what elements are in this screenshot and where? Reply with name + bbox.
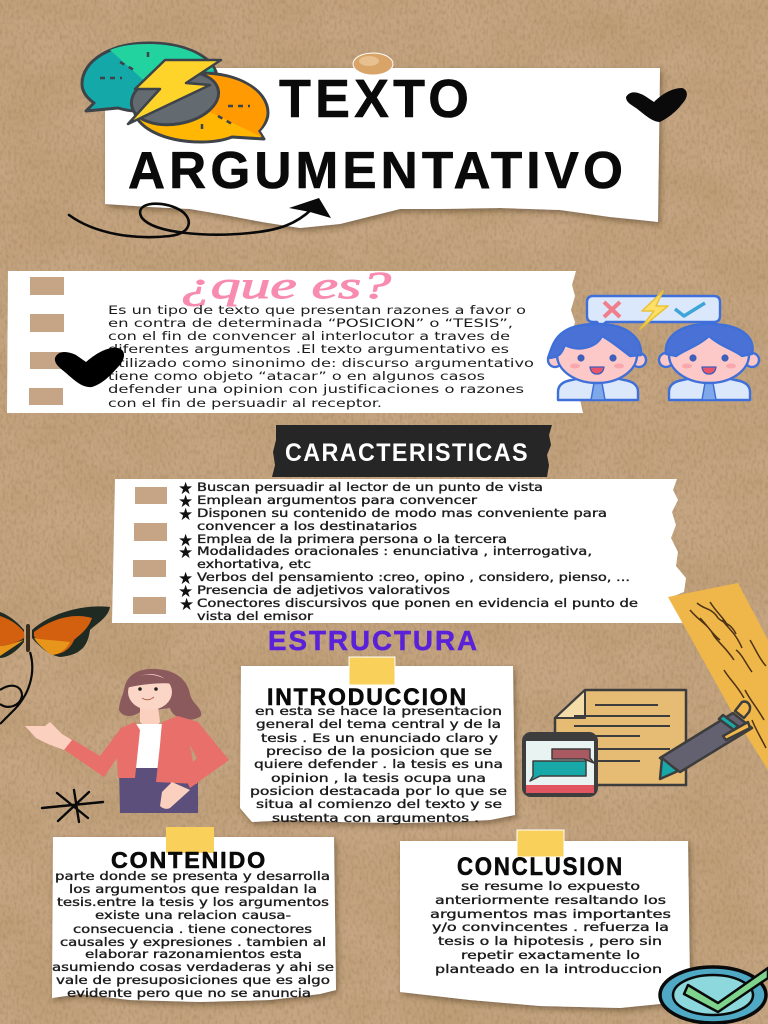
definition text: utilizado como sinonimo de: discurso argumentativo — [108, 356, 534, 370]
body text: argumentos mas importantes — [430, 907, 671, 921]
body text: parte donde se presenta y desarrolla — [55, 869, 330, 883]
yellow tape — [517, 830, 564, 857]
body text: se resume lo expuesto — [461, 879, 640, 893]
phone — [523, 733, 597, 796]
star bullets: ★ — [178, 531, 193, 551]
body text: los argumentos que respaldan la — [69, 882, 317, 896]
torn paper: caracteristicas — [112, 479, 686, 623]
title text: TEXTO — [279, 69, 473, 129]
definition text: diferentes argumentos .El texto argumentativo es — [108, 342, 509, 356]
icon: butterfly — [0, 606, 110, 658]
body text: anteriormente resaltando los — [435, 893, 666, 907]
panel: que es — [7, 265, 583, 413]
panel: contenido — [52, 827, 336, 1002]
body text: situa al comienzo del texto y se — [256, 797, 502, 811]
body text: tesis o la hipotesis , pero sin — [438, 934, 662, 948]
icon: aged handwritten paper — [668, 583, 768, 770]
body text: evidente pero que no se anuncia — [67, 986, 311, 1000]
body text: tesis . Es un enunciado claro y — [261, 731, 498, 745]
list text: Conectores discursivos que ponen en evidencia el punto de — [197, 596, 638, 610]
heading: CONCLUSION — [457, 853, 624, 881]
body text: asumiendo cosas verdaderas y ahi se — [52, 960, 334, 974]
title text — [128, 69, 627, 200]
body text: existe una relacion causa- — [95, 908, 291, 922]
body text: opinion , la tesis ocupa una — [271, 771, 486, 785]
torn paper: title — [105, 68, 660, 228]
body text: y/o convincentes . refuerza la — [432, 920, 669, 934]
body text: en esta se hace la presentacion — [255, 704, 502, 718]
speech bubble with cross and check — [587, 291, 720, 329]
paper cut-outs — [29, 277, 64, 405]
star bullets — [178, 479, 194, 615]
illustration: presenting woman — [25, 669, 229, 813]
body text: repetir exactamente lo — [461, 948, 640, 962]
body text: elaborar razonamientos esta — [85, 947, 302, 961]
body text: general del tema central y de la — [256, 717, 501, 731]
torn paper: que es — [7, 271, 583, 413]
body text — [250, 704, 507, 825]
star bullets: ★ — [178, 569, 193, 589]
star bullets: ★ — [178, 505, 193, 525]
icon: black check top right — [626, 88, 687, 122]
title text: ARGUMENTATIVO — [128, 142, 627, 200]
body text: planteado en la introduccion — [435, 962, 662, 976]
body text — [430, 879, 671, 976]
definition text: defender una opinion con justificaciones o razones — [108, 382, 524, 396]
list text: Emplea de la primera persona o la tercera — [197, 532, 507, 546]
icon: document, phone and pen — [523, 690, 752, 796]
body text: sustenta con argumentos . — [272, 811, 479, 825]
title panel — [69, 43, 687, 237]
boy right — [659, 324, 759, 400]
list text: Modalidades oracionales : enunciativa , interrogativa, — [197, 544, 592, 558]
definition text: Es un tipo de texto que presentan razones a favor o — [108, 303, 526, 317]
body text — [52, 869, 334, 1000]
definition text: con el fin de persuadir al receptor. — [108, 396, 382, 410]
star bullets: ★ — [178, 582, 193, 602]
heading: INTRODUCCION — [267, 684, 468, 711]
document — [555, 690, 686, 785]
list text: Verbos del pensamiento :creo, opino , considero, pienso, ... — [197, 570, 630, 584]
star bullets: ★ — [178, 543, 193, 563]
boy left — [548, 324, 646, 400]
body text: preciso de la posicion que se — [266, 744, 492, 758]
black scribble — [0, 652, 32, 724]
yellow tape — [349, 657, 395, 685]
icon: debate speech bubbles with lightning — [82, 43, 268, 142]
yellow tape — [166, 827, 214, 853]
heading: estructura: ESTRUCTURA — [268, 625, 479, 656]
heading: caracteristicas: CARACTERISTICAS — [285, 439, 529, 467]
star bullets: ★ — [178, 479, 193, 499]
heading: que es: ¿que es? — [181, 265, 391, 307]
body text: consecuencia . tiene conectores — [73, 922, 312, 936]
icon: check badge — [660, 967, 768, 1023]
definition text — [108, 303, 534, 410]
star bullets: ★ — [178, 492, 193, 512]
list text — [197, 480, 638, 623]
list text: Presencia de adjetivos valorativos — [197, 583, 450, 597]
definition text: tiene como objeto “atacar” o en algunos casos — [108, 369, 485, 383]
panel: conclusion — [400, 830, 690, 1008]
body text: causales y expresiones . tambien al — [60, 935, 326, 949]
body text: vale de presuposiciones que es algo — [56, 973, 330, 987]
star bullets: ★ — [179, 595, 194, 615]
heading: CONTENIDO — [111, 847, 267, 873]
icon: two debating boys — [548, 291, 759, 400]
note paper — [52, 837, 336, 1002]
list text: vista del emisor — [197, 609, 313, 623]
list text: Disponen su contenido de modo mas conveniente para — [197, 506, 607, 520]
list text: Buscan persuadir al lector de un punto de vista — [197, 480, 543, 494]
panel: introduccion — [240, 657, 515, 825]
definition text: con el fin de convencer al interlocutor a traves de — [108, 329, 510, 343]
note paper — [240, 666, 515, 823]
body text: quiere defender . la tesis es una — [254, 757, 503, 771]
pen — [660, 702, 752, 779]
definition text: en contra de determinada “POSICION” o “TESIS”, — [108, 316, 513, 330]
list text: Emplean argumentos para convencer — [197, 493, 477, 507]
pushpin — [353, 53, 393, 75]
note paper — [400, 841, 690, 1008]
list text: convencer a los destinatarios — [197, 519, 417, 533]
icon: black check — [55, 348, 124, 387]
body text: posicion destacada por lo que se — [250, 784, 507, 798]
paper cut-outs — [133, 487, 167, 614]
heading: caracteristicas — [272, 425, 552, 477]
icon: asterisk doodle — [42, 790, 103, 822]
body text: tesis.entre la tesis y los argumentos — [57, 895, 329, 909]
panel: caracteristicas — [112, 479, 686, 623]
list text: exhortativa, etc — [197, 557, 311, 571]
curly arrow — [69, 198, 331, 237]
